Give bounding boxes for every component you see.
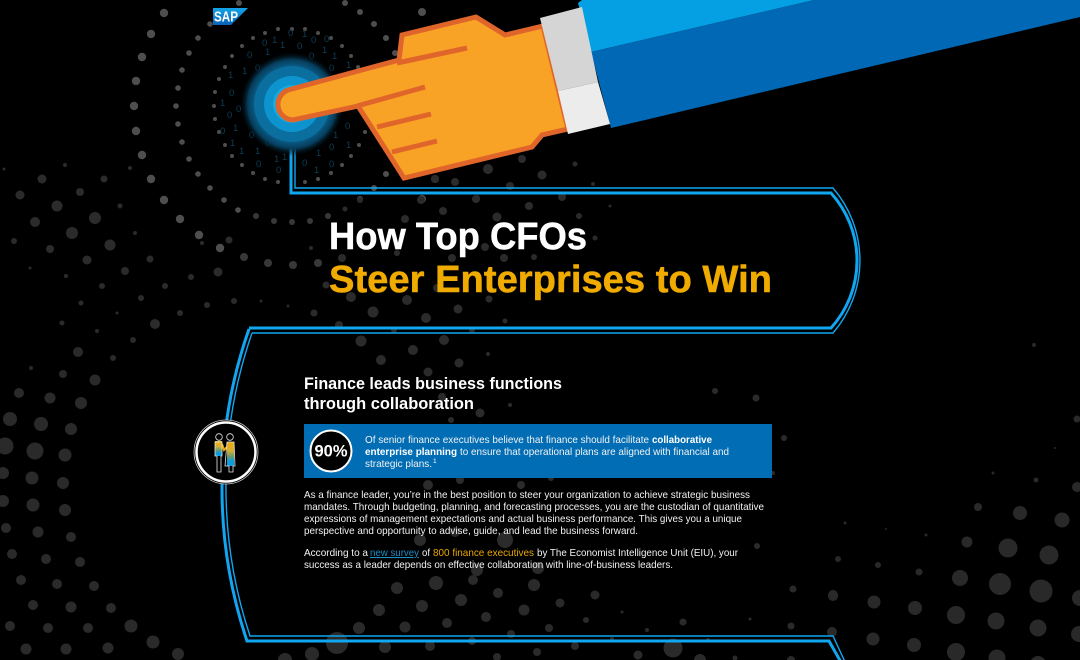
stat badge: [310, 430, 352, 472]
binary digits around the touch point: 0: [262, 38, 267, 49]
body paragraph: perspective and opportunity to advise, guide, and lead the business forward.: [304, 525, 638, 537]
binary digits around the touch point: 0: [249, 130, 254, 141]
survey paragraph: of: [422, 547, 430, 559]
background: concentric dot rings: [130, 0, 439, 252]
binary digits around the touch point: 1: [242, 66, 247, 77]
binary digits around the touch point: 0: [247, 50, 252, 61]
binary digits around the touch point: 0: [302, 158, 307, 169]
sleeve: [578, 0, 1080, 128]
binary digits around the touch point: 0: [297, 41, 302, 52]
binary digits around the touch point: 0: [329, 142, 334, 153]
binary digits around the touch point: 1: [255, 146, 260, 157]
stat text: 1: [433, 458, 437, 465]
binary digits around the touch point: 0: [255, 63, 260, 74]
binary digits around the touch point: 1: [280, 40, 285, 51]
binary digits around the touch point: 1: [333, 130, 338, 141]
section heading: Finance leads business functions: [304, 375, 562, 393]
binary digits around the touch point: 0: [311, 35, 316, 46]
binary digits around the touch point: 1: [282, 152, 287, 163]
title: [329, 216, 772, 301]
binary digits around the touch point: 0: [309, 51, 314, 62]
stat text: enterprise planning: [365, 446, 457, 458]
connector lines: body frame: [222, 329, 846, 660]
binary digits around the touch point: 1: [332, 51, 337, 62]
background: bottom centre dots: [278, 575, 838, 660]
background: upper-left and band dots: [2, 155, 787, 576]
icon: two people shaking hands: [194, 420, 258, 484]
section heading: through collaboration: [304, 395, 474, 413]
body paragraph: [304, 489, 764, 537]
binary digits around the touch point: 1: [322, 45, 327, 56]
survey paragraph: 800 finance executives: [433, 547, 534, 559]
stat text: Of senior finance executives believe that finance should facilitate: [365, 434, 649, 446]
survey paragraph: by The Economist Intelligence Unit (EIU), your: [537, 547, 738, 559]
binary digits around the touch point: 0: [329, 159, 334, 170]
binary digits around the touch point: 1: [274, 154, 279, 165]
binary digits around the touch point: 1: [314, 165, 319, 176]
binary digits around the touch point: 1: [265, 47, 270, 58]
binary digits around the touch point: 1: [233, 123, 238, 134]
binary digits around the touch point: 1: [272, 35, 277, 46]
stat text: to ensure that operational plans are aligned with financial and: [460, 446, 729, 458]
background: lower-right dots: [828, 343, 1080, 660]
background: lower-left dots: [0, 329, 184, 660]
binary digits around the touch point: 0: [265, 138, 270, 149]
survey paragraph: According to a: [304, 547, 368, 559]
body paragraph: mandates. Through budgeting, planning, and forecasting processes, you are the custodian of quantitative: [304, 501, 764, 513]
binary digits around the touch point: 1: [239, 146, 244, 157]
survey paragraph: success as a leader depends on effective collaboration with line-of-business leaders.: [304, 559, 673, 571]
body paragraph: expressions of management expectations and actual business performance. This gives you a unique: [304, 513, 742, 525]
connector lines: title frame: [249, 122, 860, 333]
stat badge: 90%: [314, 442, 348, 460]
binary digits around the touch point: 0: [324, 34, 329, 45]
binary digits around the touch point: 0: [276, 165, 281, 176]
binary digits around the touch point: 0: [345, 121, 350, 132]
stat text: collaborative: [652, 434, 712, 446]
binary digits around the touch point: 1: [346, 60, 351, 71]
survey paragraph: [304, 547, 738, 571]
binary digits around the touch point: 0: [229, 88, 234, 99]
binary digits around the touch point: 0: [220, 126, 225, 137]
section heading: [304, 375, 562, 413]
hand: [278, 17, 568, 178]
callout: 90% stat: [304, 424, 772, 478]
binary digits around the touch point: 0: [329, 63, 334, 74]
binary digits around the touch point: 1: [302, 29, 307, 40]
pointing hand illustration: [278, 0, 1080, 178]
stat text: strategic plans.: [365, 458, 432, 470]
binary digits around the touch point: 0: [227, 110, 232, 121]
binary digits around the touch point: 1: [228, 70, 233, 81]
shirt cuff: [540, 7, 610, 134]
binary digits around the touch point: [220, 28, 351, 176]
title: Steer Enterprises to Win: [329, 259, 772, 301]
binary digits around the touch point: 0: [236, 104, 241, 115]
binary digits around the touch point: 1: [230, 138, 235, 149]
glowing touch point: [240, 52, 344, 156]
binary digits around the touch point: 0: [288, 28, 293, 39]
binary digits around the touch point: 1: [220, 98, 225, 109]
binary digits around the touch point: 0: [256, 159, 261, 170]
title: How Top CFOs: [329, 216, 587, 258]
binary digits around the touch point: 1: [346, 140, 351, 151]
binary digits around the touch point: 1: [316, 148, 321, 159]
body paragraph: As a finance leader, you’re in the best position to steer your organization to achieve strategic business: [304, 489, 750, 501]
SAP logo: SAP: [214, 10, 238, 26]
stat text: [365, 434, 729, 470]
survey paragraph: new survey: [370, 547, 420, 559]
